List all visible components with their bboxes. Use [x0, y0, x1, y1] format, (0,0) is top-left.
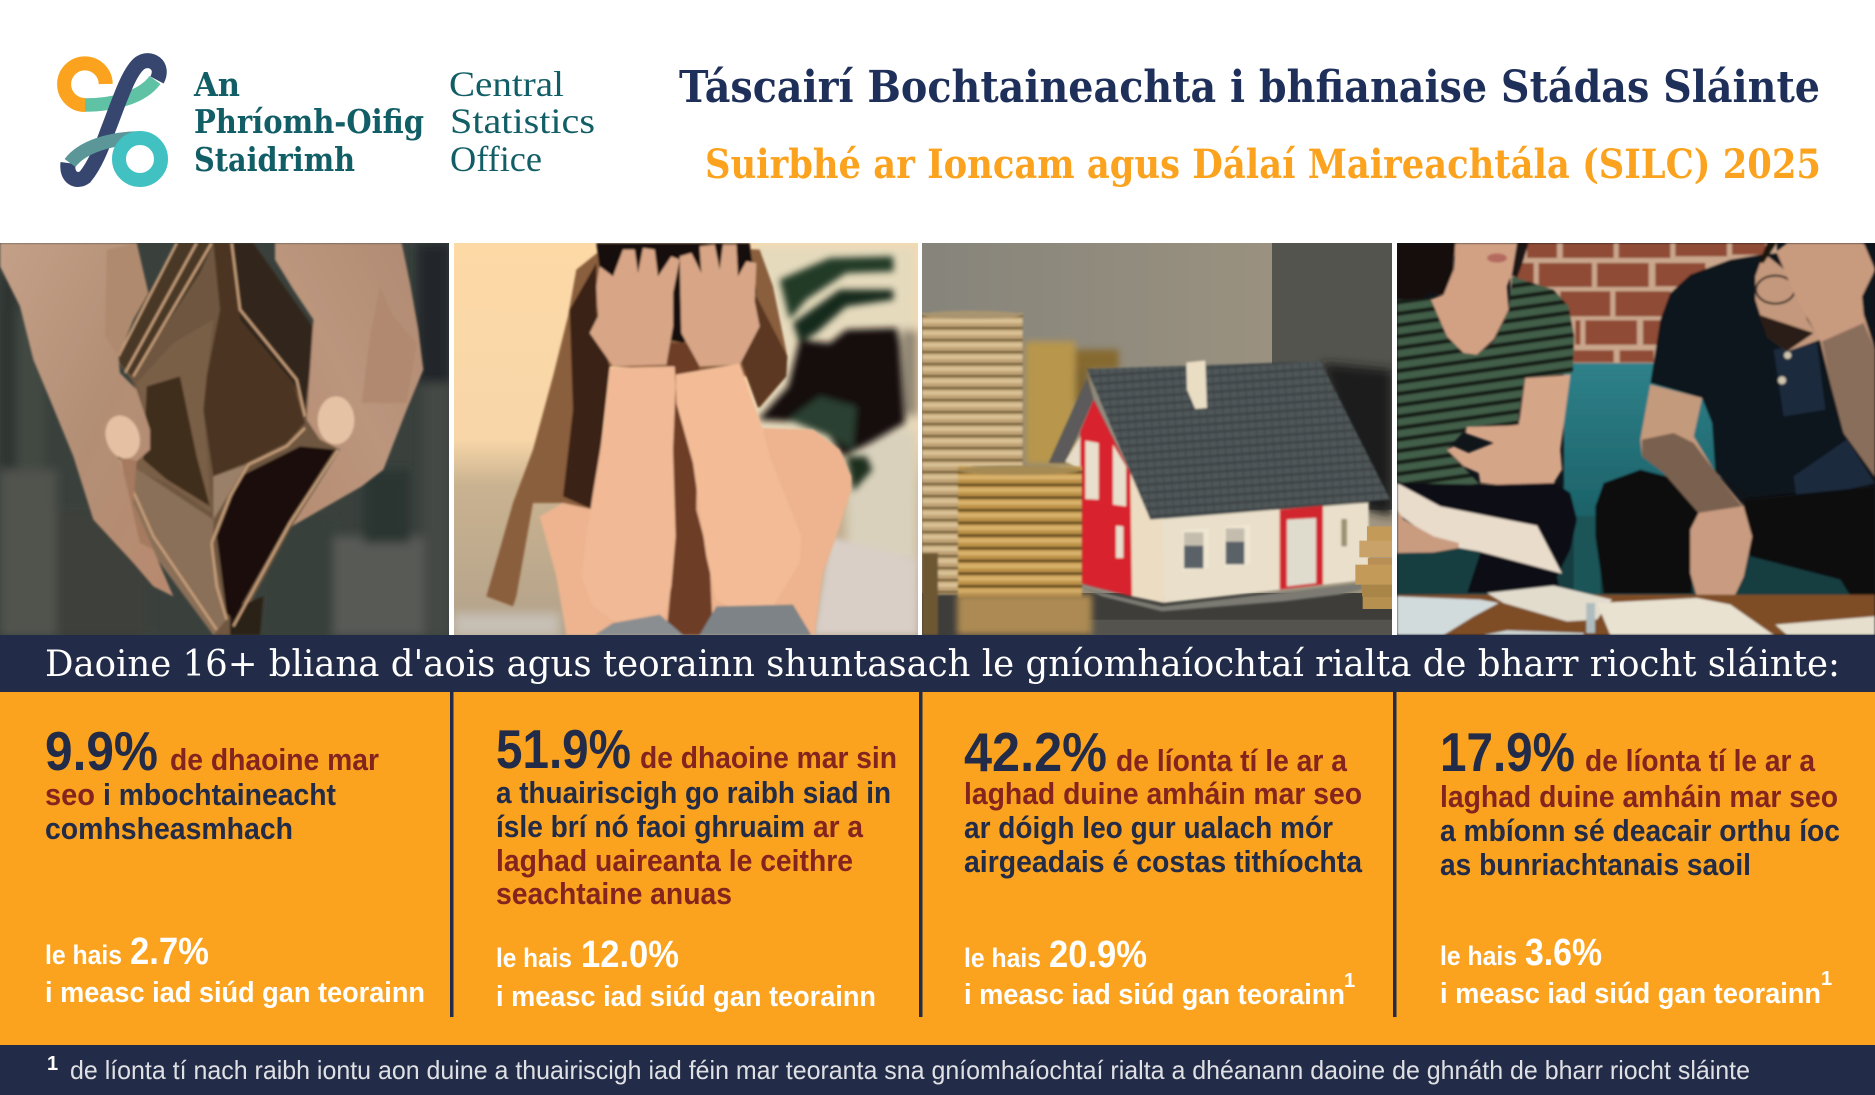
- description text: [1440, 743, 1840, 882]
- woman's pants: [1397, 481, 1577, 593]
- description text: laghad duine amháin mar seo: [964, 776, 1362, 811]
- logo text: Irish name: [193, 65, 424, 179]
- photo: model house and stacks of coins: [922, 243, 1392, 635]
- description text: [964, 743, 1363, 879]
- brick wall: [1510, 243, 1777, 365]
- coin stack back: [922, 311, 1023, 635]
- comparison: 12.0%: le hais: [496, 943, 572, 973]
- photo: couple looking at paperwork: [1397, 243, 1875, 635]
- comparison: 20.9%: i measc iad siúd gan teorainn: [964, 979, 1345, 1011]
- logo text: English name: Statistics: [450, 101, 595, 141]
- woman's arm and hand: [1447, 375, 1570, 485]
- header background: [0, 0, 1875, 243]
- logo text: Irish name: Staidrimh: [194, 140, 355, 179]
- description text: de dhaoine mar sin: [640, 740, 897, 775]
- logo text: English name: Office: [450, 139, 542, 179]
- man's arm and hand: [1640, 385, 1752, 608]
- sofa: [1564, 363, 1720, 520]
- icon: CSO knot mark: [64, 61, 161, 180]
- description text: [496, 740, 897, 911]
- description text: seachtaine anuas: [496, 876, 732, 911]
- coin stack right: [1355, 526, 1392, 609]
- comparison: 20.9%: 20.9%: [1049, 934, 1147, 976]
- comparison: 12.0%: [496, 934, 876, 1013]
- man's raised arm and hand: [1776, 243, 1875, 476]
- heading band: Daoine 16+ bliana d'aois agus teorainn shuntasach le gníomhaíochtaí rialta de bharr riocht sláinte:: [45, 644, 1840, 685]
- comparison: 3.6%: 1: [1821, 968, 1832, 990]
- woman's shirt: [1397, 276, 1574, 503]
- description text: i mbochtaineacht: [103, 777, 336, 812]
- comparison: 20.9%: 1: [1344, 970, 1355, 992]
- statistic: 42.2%: 42.2%: [964, 721, 1107, 783]
- statistic: 17.9%: 17.9%: [1440, 721, 1575, 783]
- description text: [45, 742, 379, 846]
- logo: Central Statistics Office: [64, 61, 595, 180]
- comparison: 2.7%: 2.7%: [130, 931, 209, 973]
- description text: de dhaoine mar: [170, 742, 379, 777]
- footnote: [0, 1045, 1875, 1095]
- woman's face and chest: [1430, 243, 1517, 355]
- comparison: 20.9%: le hais: [964, 943, 1041, 973]
- photo: woman holding her head: [453, 243, 918, 636]
- man's shirt: [1650, 243, 1875, 496]
- comparison: 3.6%: [1440, 932, 1832, 1010]
- panel: 51.9% low mood or depression: [496, 718, 897, 1013]
- description text: a thuairiscigh go raibh siad in: [496, 775, 891, 810]
- table and documents: [1397, 595, 1875, 635]
- description text: de líonta tí le ar a: [1585, 743, 1816, 778]
- statistic: 9.9%: 9.9%: [45, 720, 158, 782]
- description text: ar a: [813, 809, 864, 844]
- wallet body: [117, 243, 338, 635]
- description text: ísle brí nó faoi ghruaim: [496, 809, 805, 844]
- paper: [1397, 483, 1562, 574]
- woman's hair: [1398, 243, 1456, 300]
- panel: 9.9% in consistent poverty: [45, 720, 425, 1009]
- footnote: de líonta tí nach raibh iontu aon duine a thuairiscigh iad féin mar teoranta sna gníomhaíochtaí rialta a dhéanann daoine de ghnáth de bharr riocht sláinte: [70, 1055, 1750, 1085]
- man's face and beard: [1755, 253, 1820, 351]
- description text: ar dóigh leo gur ualach mór: [964, 810, 1333, 845]
- logo text: Irish name: An: [193, 65, 240, 104]
- background room: [453, 243, 918, 636]
- comparison: 3.6%: i measc iad siúd gan teorainn: [1440, 978, 1821, 1010]
- torso and sweater: [540, 428, 851, 635]
- comparison: 20.9%: [964, 934, 1355, 1011]
- description text: a mbíonn sé deacair orthu íoc: [1440, 813, 1840, 848]
- dividers: [450, 692, 1396, 1017]
- house: [1049, 360, 1390, 611]
- comparison: 2.7%: i measc iad siúd gan teorainn: [45, 977, 425, 1009]
- footnote: 1: [47, 1053, 58, 1075]
- comparison: 12.0%: i measc iad siúd gan teorainn: [496, 981, 876, 1013]
- photo: hands opening an empty wallet: [0, 243, 450, 636]
- heading band: [0, 635, 1875, 692]
- description text: airgeadais é costas tithíochta: [964, 844, 1363, 879]
- logo text: English name: [449, 64, 595, 179]
- statistic: 51.9%: 51.9%: [496, 718, 631, 780]
- man's legs: [1595, 470, 1699, 594]
- comparison: 3.6%: le hais: [1440, 941, 1517, 971]
- comparison: 3.6%: 3.6%: [1525, 932, 1602, 974]
- description text: laghad uaireanta le ceithre: [496, 843, 853, 878]
- plant: [758, 256, 905, 491]
- description text: as bunriachtanais saoil: [1440, 847, 1751, 882]
- blurred coins: [1025, 341, 1119, 465]
- hands: [590, 248, 680, 366]
- comparison: 2.7%: le hais: [45, 940, 122, 970]
- comparison: 2.7%: [45, 931, 425, 1009]
- description text: comhsheasmhach: [45, 811, 293, 846]
- orange statistics panel background: [0, 692, 1875, 1045]
- right hand: [275, 243, 423, 526]
- knees: [595, 615, 683, 635]
- logo text: Irish name: Phríomh-Oifig: [194, 102, 424, 141]
- logo text: English name: Central: [449, 64, 564, 104]
- comparison: 12.0%: 12.0%: [581, 934, 679, 976]
- coin stack front: [957, 466, 1082, 598]
- description text: seo: [45, 777, 95, 812]
- panel: 42.2% housing costs a heavy burden: [964, 721, 1363, 1011]
- panel: 17.9% difficulty paying for essentials: [1440, 721, 1840, 1010]
- hair: [486, 243, 851, 635]
- description text: de líonta tí le ar a: [1116, 743, 1348, 778]
- sleeves: [589, 364, 678, 591]
- left hand: [0, 243, 173, 596]
- description text: laghad duine amháin mar seo: [1440, 779, 1838, 814]
